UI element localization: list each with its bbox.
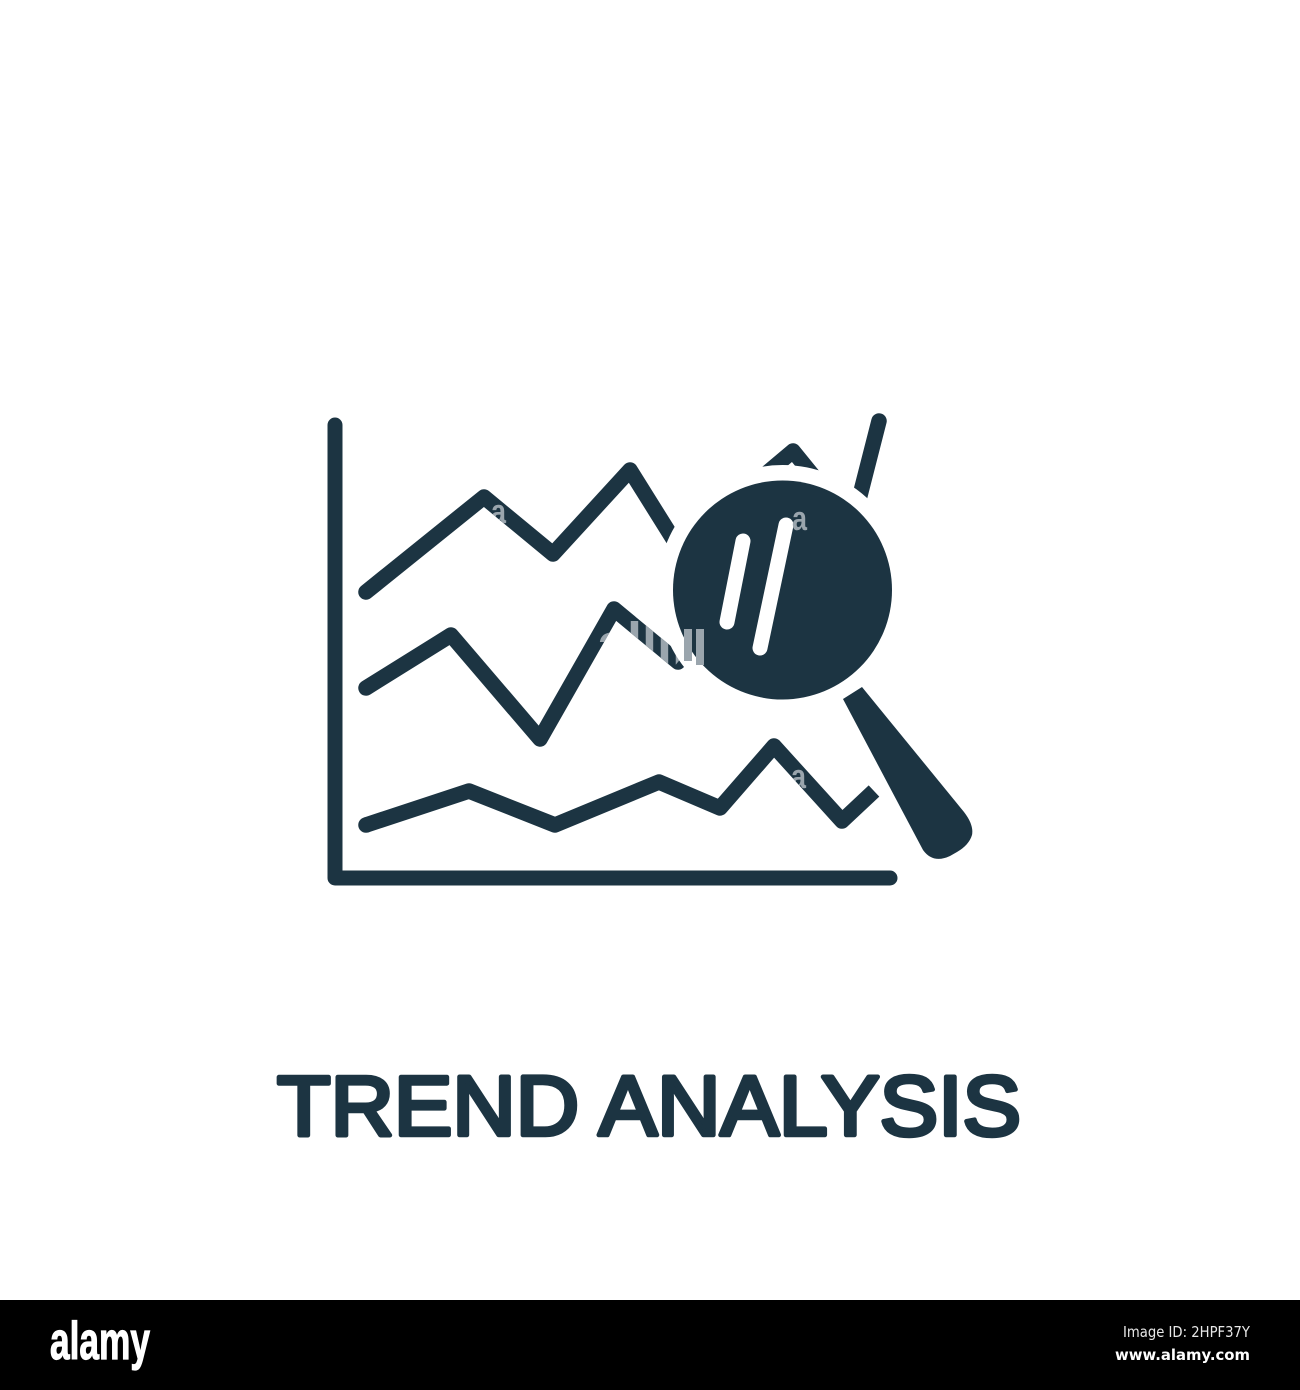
icon: trend analysis chart with magnifier <box>335 421 972 878</box>
watermark on trend lines: a <box>791 758 807 796</box>
magnifier lens <box>673 480 892 700</box>
lens glare short <box>727 541 743 622</box>
lens watermark marks: a <box>792 500 808 538</box>
watermark on trend lines: a <box>491 493 507 531</box>
magnifier lens clearing ring <box>658 465 908 715</box>
chart axes <box>335 425 890 878</box>
middle trend line <box>366 609 678 739</box>
footer logo: alamy <box>50 1312 150 1371</box>
watermark on trend lines <box>491 493 807 796</box>
title: TREND ANALYSIS <box>277 1059 1021 1153</box>
image id: Image ID: 2HPF37Y <box>1123 1323 1251 1341</box>
footer bar <box>0 1300 1300 1390</box>
lens watermark marks <box>684 500 808 665</box>
lens glare long <box>760 525 786 648</box>
bottom trend line <box>358 746 874 833</box>
website: www.alamy.com <box>1115 1346 1250 1364</box>
top trend line <box>366 421 879 592</box>
watermark on trend lines: allll <box>597 611 687 678</box>
magnifier handle <box>843 687 972 859</box>
